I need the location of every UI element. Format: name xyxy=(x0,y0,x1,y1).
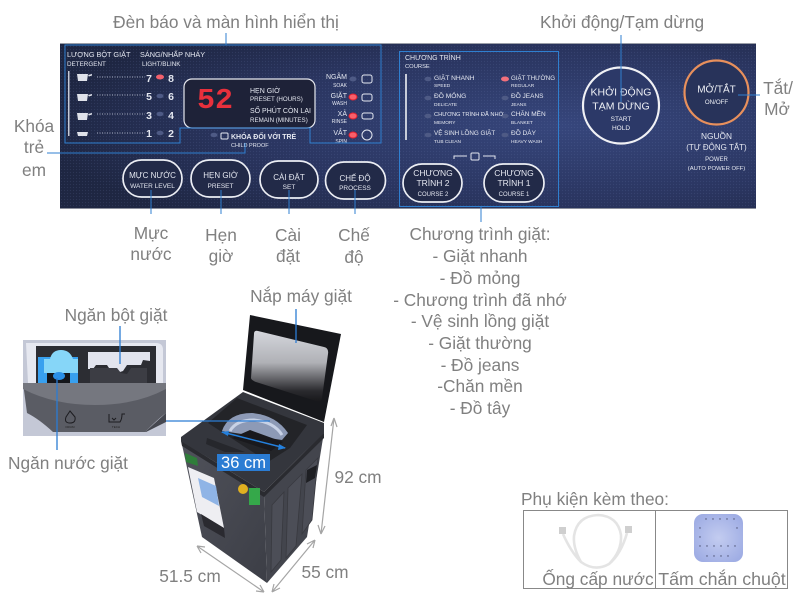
label: on off: Mở xyxy=(764,99,790,119)
buttons: water level, preset, set, process: WATER LEVEL xyxy=(130,183,175,190)
buttons: water level, preset, set, process: HẸN GIỜ xyxy=(203,171,238,180)
label: water level: nước xyxy=(130,244,172,264)
detergent section: 6 xyxy=(168,91,174,103)
wash stages: RINSE xyxy=(332,119,348,125)
course section: REGULAR xyxy=(511,83,535,89)
label: course list: - Đồ mỏng xyxy=(440,268,520,288)
36 cm measurement xyxy=(217,431,286,472)
label: set: đặt xyxy=(276,246,300,266)
course section: COURSE 1 xyxy=(499,192,530,198)
detergent section xyxy=(67,49,205,140)
display: 52: SỐ PHÚT CÒN LẠI xyxy=(250,105,311,115)
course section: CHĂN MỀN xyxy=(511,108,546,118)
start/hold button: HOLD xyxy=(612,125,630,132)
buttons: water level, preset, set, process: PROCESS xyxy=(339,185,372,192)
detergent section: LIGHT/BLINK xyxy=(142,61,181,68)
display: 52: REMAIN (MINUTES) xyxy=(250,117,308,124)
child lock indicator: KHÓA ĐỐI VỚI TRẺ xyxy=(231,131,297,141)
label: course list: - Đồ tây xyxy=(450,398,511,418)
label: child lock: Khóa xyxy=(14,116,55,136)
icon: water hose xyxy=(559,515,632,568)
label: hose: Ống cấp nước xyxy=(542,569,654,589)
power button: NGUỒN xyxy=(701,130,732,141)
label: display: Đèn báo và màn hình hiển thị xyxy=(113,12,339,32)
label: start pause: Khởi động/Tạm dừng xyxy=(540,12,704,32)
label: guard: Tấm chắn chuột xyxy=(658,568,786,589)
label: preset: giờ xyxy=(209,246,233,266)
label: preset xyxy=(205,225,237,266)
callout lines xyxy=(47,33,760,222)
wash stages: SPIN xyxy=(335,139,347,145)
detergent section: 1 xyxy=(146,128,152,140)
label: course list xyxy=(393,224,567,418)
label: process: Chế xyxy=(338,225,370,245)
course section: CHƯƠNG TRÌNH ĐÃ NHỚ xyxy=(434,111,504,118)
power button: ON/OFF xyxy=(705,99,728,106)
course section: GIẶT NHANH xyxy=(434,73,475,82)
course section: COURSE 2 xyxy=(418,192,449,198)
wash stages: VẮT xyxy=(333,128,348,137)
detergent section: 5 xyxy=(146,91,152,103)
power button: (AUTO POWER OFF) xyxy=(688,166,745,172)
wash stages: GIẶT xyxy=(331,91,348,100)
start/hold button: KHỞI ĐỘNG xyxy=(591,86,651,98)
course section: CHƯƠNG xyxy=(494,168,534,178)
display: 52 xyxy=(184,79,315,128)
detergent section: 4 xyxy=(168,110,174,122)
course section: ĐỒ DÀY xyxy=(511,127,537,137)
wash stages xyxy=(326,72,373,145)
label: on off: Tắt/ xyxy=(763,78,793,98)
detergent drawer photo: TECH xyxy=(112,425,120,429)
course section: MEMORY xyxy=(434,120,456,126)
label: liquid compartment: Ngăn nước giặt xyxy=(8,453,128,473)
detergent section: 2 xyxy=(168,128,174,140)
callout lines: machine xyxy=(57,309,296,450)
label: height: 92 cm xyxy=(334,467,382,487)
detergent drawer photo: DRUM xyxy=(66,425,75,429)
start/hold button xyxy=(583,68,659,144)
control panel xyxy=(60,43,756,209)
start/hold button: TẠM DỪNG xyxy=(592,100,650,112)
label: child lock: trẻ xyxy=(24,137,44,157)
detergent drawer photo xyxy=(23,340,166,436)
washing machine xyxy=(181,315,341,583)
machine body xyxy=(181,440,267,583)
course section: DELICATE xyxy=(434,102,457,108)
child lock indicator: CHILD PROOF xyxy=(231,143,269,149)
buttons: water level, preset, set, process xyxy=(123,160,386,199)
wash stages: XẢ xyxy=(338,109,347,118)
power button: POWER xyxy=(705,157,728,163)
course section xyxy=(403,53,555,202)
buttons: water level, preset, set, process: PRESET xyxy=(207,183,234,190)
course section: JEANS xyxy=(511,102,526,108)
wash stages: NGÂM xyxy=(326,72,347,81)
label: course list: - Giặt nhanh xyxy=(432,246,528,266)
label: child lock: em xyxy=(22,160,46,180)
course section: BLANKET xyxy=(511,120,533,126)
detergent section: 8 xyxy=(168,73,174,85)
wash stages: WASH xyxy=(332,101,347,107)
label: water level: Mực xyxy=(134,223,169,243)
front sticker xyxy=(188,467,224,528)
course section: HEAVY WASH xyxy=(511,139,543,145)
36 cm measurement: 36 cm xyxy=(221,454,266,472)
child lock indicator xyxy=(210,131,297,149)
power button xyxy=(684,60,748,172)
lid xyxy=(243,315,341,422)
label: course list: - Giặt thường xyxy=(428,333,532,353)
label: on off xyxy=(763,78,793,119)
buttons: water level, preset, set, process: SET xyxy=(283,184,295,191)
detergent section: DETERGENT xyxy=(67,61,106,68)
dimension arrows xyxy=(197,418,337,592)
label: course list: Chương trình giặt: xyxy=(409,224,551,244)
label: lid: Nắp máy giặt xyxy=(250,286,352,306)
accessories box xyxy=(524,510,788,589)
label: course list: -Chăn mền xyxy=(437,376,523,396)
start/hold button: START xyxy=(611,116,631,123)
course section: SPEED xyxy=(434,83,451,89)
wash stages: SOAK xyxy=(333,83,348,89)
course section: CHƯƠNG xyxy=(413,168,453,178)
tub xyxy=(222,413,288,440)
course section: TRÌNH 2 xyxy=(416,178,450,188)
display: 52: HẸN GIỜ xyxy=(250,86,280,95)
label: process xyxy=(338,225,370,267)
label: depth: 51.5 cm xyxy=(159,566,221,586)
buttons: water level, preset, set, process: CÀI ĐẶT xyxy=(273,173,305,182)
display: 52: 52 xyxy=(197,84,233,117)
course section: CHƯƠNG TRÌNH xyxy=(405,53,461,62)
detergent section: 7 xyxy=(146,73,152,85)
power button: (TỰ ĐỘNG TẮT) xyxy=(686,143,747,152)
label: course list: - Chương trình đã nhớ xyxy=(393,290,567,310)
course section: GIẶT THƯỜNG xyxy=(511,75,555,82)
course section: TUB CLEAN xyxy=(434,139,461,145)
power button: MỞ/TẮT xyxy=(697,82,736,96)
label: set xyxy=(275,225,301,266)
buttons: water level, preset, set, process: CHẾ ĐỘ xyxy=(339,173,371,183)
icon: rodent guard plate xyxy=(694,514,743,562)
course section: COURSE xyxy=(405,64,430,70)
label: preset: Hẹn xyxy=(205,225,237,245)
detergent section: LƯỢNG BỘT GIẶT xyxy=(67,50,131,59)
course section: ĐỒ JEANS xyxy=(511,90,544,100)
detergent section: SÁNG/NHẤP NHÁY xyxy=(140,49,205,59)
course section: VỆ SINH LỒNG GIẶT xyxy=(434,127,495,137)
label: water level xyxy=(130,223,172,264)
label: course list: - Vệ sinh lồng giặt xyxy=(411,311,549,331)
detergent section: 3 xyxy=(146,110,152,122)
label: set: Cài xyxy=(275,225,301,245)
label: child lock xyxy=(14,116,55,180)
label: detergent compartment: Ngăn bột giặt xyxy=(65,305,168,325)
label: width: 55 cm xyxy=(301,562,349,582)
display: 52: PRESET (HOURS) xyxy=(250,96,303,103)
course section: ĐỒ MỎNG xyxy=(434,90,466,100)
buttons: water level, preset, set, process: MỰC NƯỚC xyxy=(129,171,176,180)
label: course list: - Đồ jeans xyxy=(441,355,520,375)
accessories heading: Phụ kiện kèm theo: xyxy=(521,489,669,509)
label: process: độ xyxy=(344,247,364,267)
course section: TRÌNH 1 xyxy=(497,178,531,188)
